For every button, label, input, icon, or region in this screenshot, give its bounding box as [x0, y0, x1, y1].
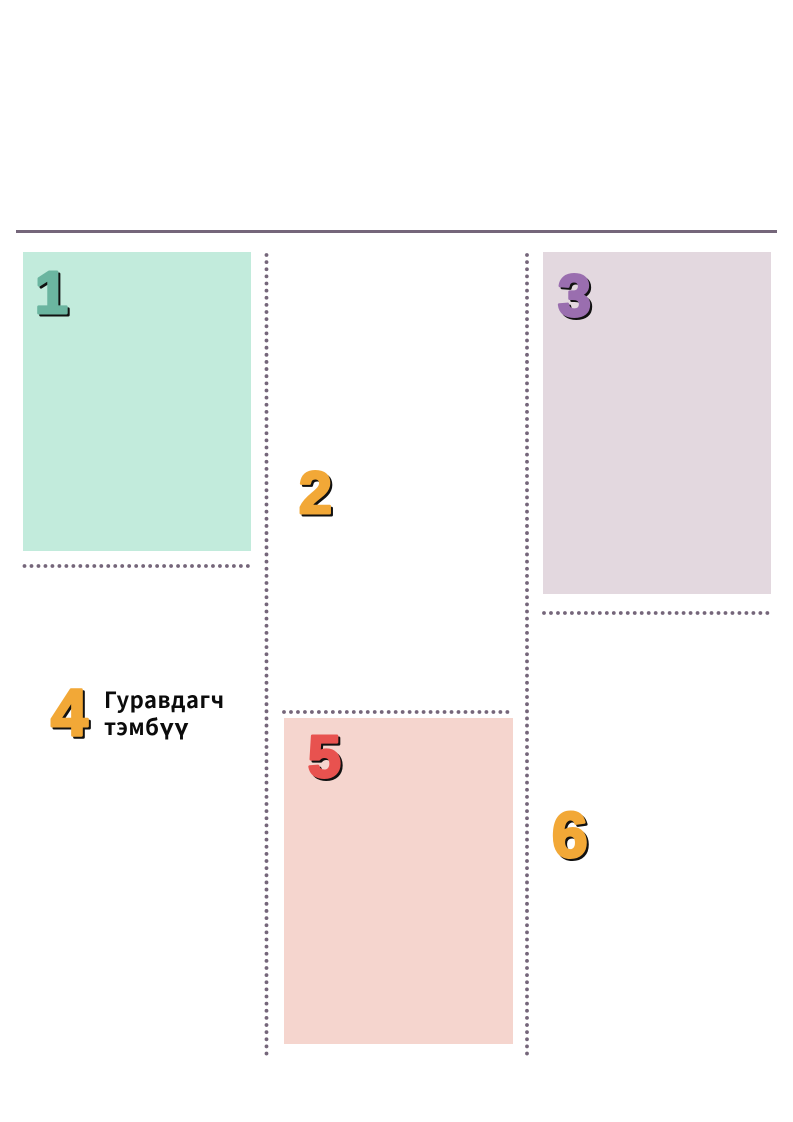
number 6: 6 [552, 799, 588, 871]
number 3: 3 [558, 263, 591, 329]
panel: 1 green [23, 252, 251, 551]
panel: 5 salmon [284, 718, 513, 1044]
heading: Гуравдагч тэмбүү: тэмбүү [104, 710, 189, 742]
heading: Гуравдагч тэмбүү: Гуравдагч [104, 683, 225, 715]
number 4: 4 [51, 675, 88, 749]
heading: Гуравдагч тэмбүү [104, 683, 225, 742]
number 2: 2 [299, 460, 332, 526]
number 5: 5 [308, 724, 341, 790]
header rule [16, 230, 777, 233]
panel: 3 mauve [543, 252, 771, 594]
number 1: 1 [35, 260, 68, 326]
